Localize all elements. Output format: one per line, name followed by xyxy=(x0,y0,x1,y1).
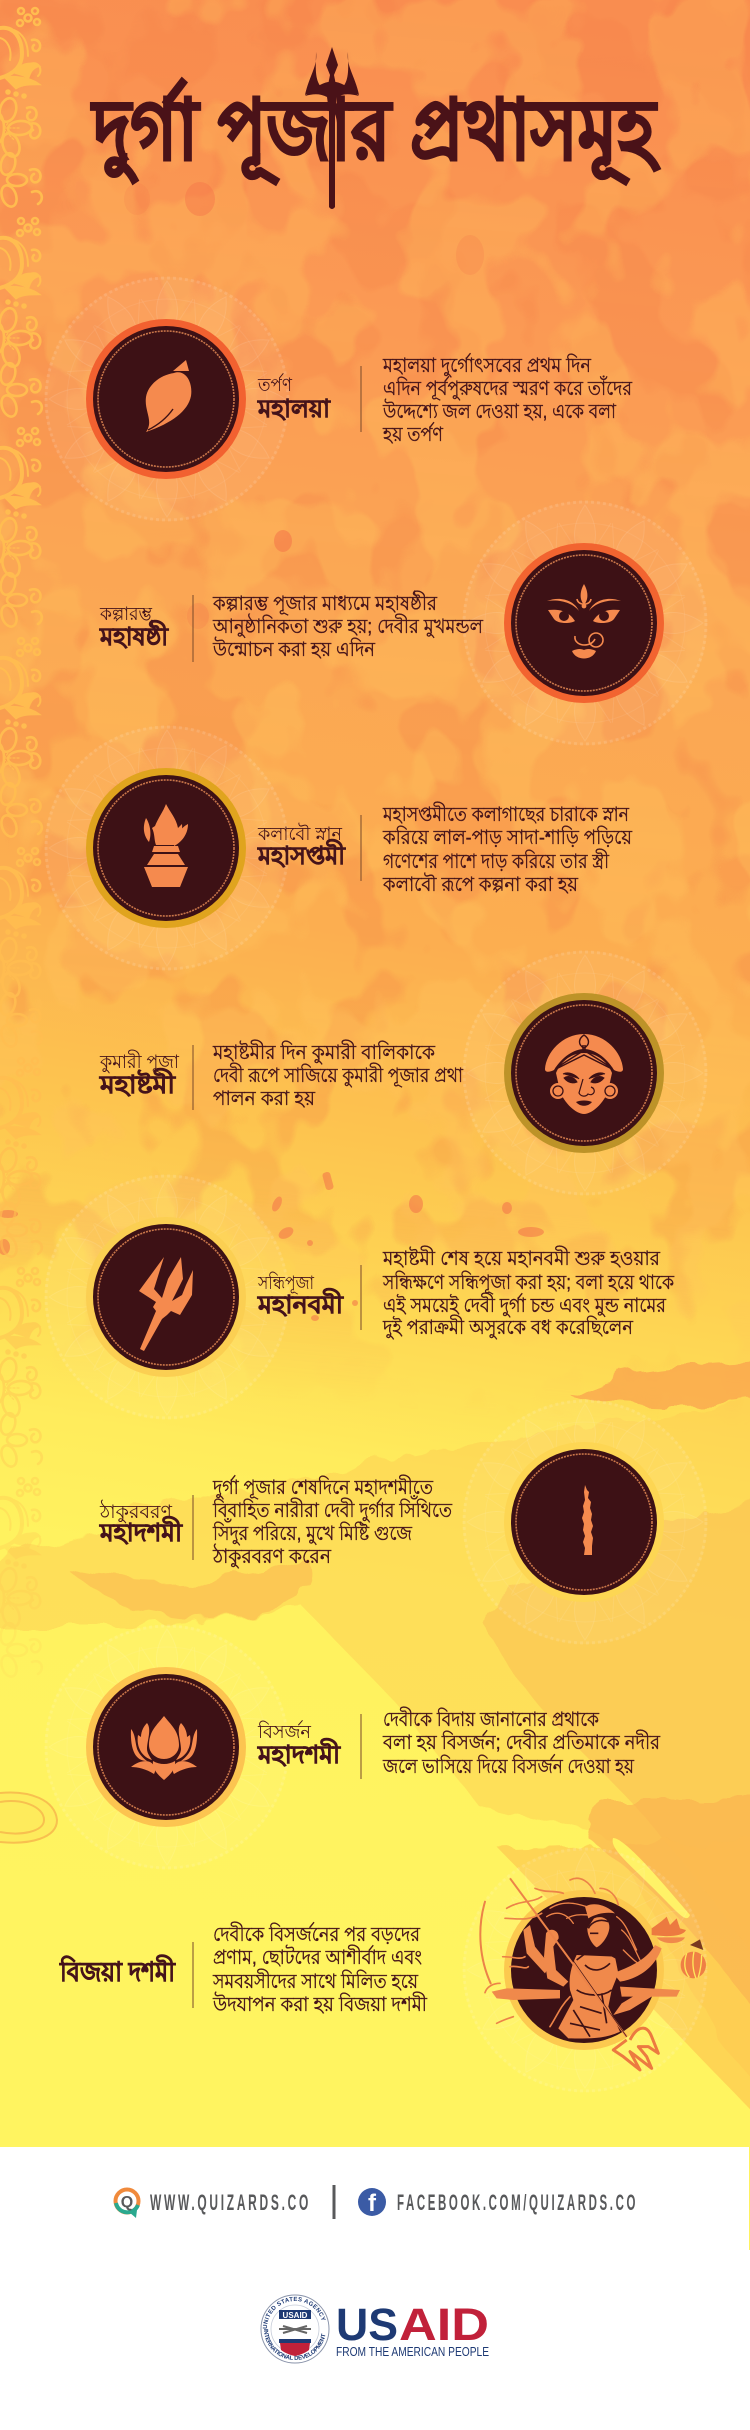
icon: kalash pot with plant xyxy=(86,768,246,928)
lower orange wash xyxy=(0,1360,750,2130)
description xyxy=(212,1922,427,2016)
footer panel xyxy=(114,2147,750,2364)
USAID wordmark: AID xyxy=(399,2299,489,2350)
description: উদযাপন করা হয় বিজয়া দশমী xyxy=(212,1992,427,2016)
description: দেবীকে বিদায় জানানোর প্রথাকে xyxy=(383,1707,600,1731)
divider xyxy=(360,815,362,881)
label: মহাষষ্ঠী xyxy=(99,620,169,651)
description: আনুষ্ঠানিকতা শুরু হয়; দেবীর মুখমন্ডল xyxy=(212,614,484,638)
description: মহালয়া দুর্গোৎসবের প্রথম দিন xyxy=(382,353,592,377)
divider xyxy=(192,1495,194,1560)
rosette background xyxy=(463,1400,707,1644)
description: সমবয়সীদের সাথে মিলিত হয়ে xyxy=(212,1969,419,1993)
label: মহাষ্টমী xyxy=(99,1068,176,1099)
description xyxy=(382,802,633,896)
USAID wordmark: FROM THE AMERICAN PEOPLE xyxy=(336,2344,489,2359)
label xyxy=(257,823,346,870)
description: হয় তর্পণ xyxy=(382,422,444,446)
flecks xyxy=(0,1171,544,1321)
label xyxy=(99,604,169,651)
description xyxy=(382,353,633,446)
rosette background xyxy=(45,1625,289,1869)
icon: quizards logo: Q xyxy=(121,2194,133,2211)
icon: goddess Durga illustration xyxy=(480,1878,706,2070)
description: মহাষ্টমীর দিন কুমারী বালিকাকে xyxy=(212,1040,436,1064)
divider xyxy=(360,1265,362,1330)
description: দেবীকে বিসর্জনের পর বড়দের xyxy=(213,1922,421,1946)
label: মহালয়া xyxy=(257,395,332,423)
label: সন্ধিপূজা xyxy=(257,1272,314,1294)
description xyxy=(382,1707,661,1778)
title xyxy=(90,47,660,209)
panel: বিজয়া দশমী xyxy=(59,1848,707,2092)
label xyxy=(257,1272,344,1319)
description: প্রণাম, ছোটদের আশীর্বাদ এবং xyxy=(213,1945,422,1969)
icon: trident xyxy=(86,1217,246,1377)
label: কল্পারম্ভ xyxy=(99,604,153,625)
panel: মহাষষ্ঠী xyxy=(99,501,707,745)
USAID wordmark: US xyxy=(336,2299,398,2350)
panel: মহাদশমী ঠাকুরবরণ xyxy=(99,1400,707,1644)
label: বিসর্জন xyxy=(257,1720,312,1743)
description: ঠাকুরবরণ করেন xyxy=(212,1544,332,1568)
description xyxy=(212,1040,464,1110)
divider xyxy=(192,1045,194,1110)
description xyxy=(382,1246,675,1339)
label: মহাদশমী xyxy=(99,1516,183,1547)
label: মহাদশমী xyxy=(257,1738,341,1769)
description: দুর্গা পূজার শেষদিনে মহাদশমীতে xyxy=(212,1475,434,1499)
panel: মহাষ্টমী xyxy=(99,951,707,1195)
rosette background xyxy=(45,1175,289,1419)
description: সন্ধিক্ষণে সন্ধিপূজা করা হয়; বলা হয়ে থাকে xyxy=(382,1271,675,1294)
label: তর্পণ xyxy=(257,373,292,396)
description: সিঁদুর পরিয়ে, মুখে মিষ্টি গুজে xyxy=(212,1519,413,1545)
description: দুই পরাক্রমী অসুরকে বধ করেছিলেন xyxy=(382,1315,634,1339)
description: কলাবৌ রূপে কল্পনা করা হয় xyxy=(382,873,579,896)
description xyxy=(212,1475,453,1568)
rosette background xyxy=(463,501,707,745)
description: বলা হয় বিসর্জন; দেবীর প্রতিমাকে নদীর xyxy=(382,1730,661,1754)
divider xyxy=(360,366,362,432)
divider xyxy=(192,1942,194,2008)
icon: sindoor streak xyxy=(504,1442,664,1602)
description: দেবী রূপে সাজিয়ে কুমারী পূজার প্রথা xyxy=(213,1063,464,1087)
icon: USAID seal: UNITED STATES AGENCY xyxy=(262,2296,326,2328)
panel: মহাদশমী বিসর্জন xyxy=(45,1625,661,1869)
icon: USAID seal: INTERNATIONAL DEVELOPMENT xyxy=(264,2329,326,2360)
description: বিবাহিত নারীরা দেবী দুর্গার সিঁথিতে xyxy=(212,1496,453,1522)
description: এদিন পূর্বপুরুষদের স্মরণ করে তাঁদের xyxy=(383,376,633,400)
icon: young girl face with crown xyxy=(504,993,664,1153)
website: WWW.QUIZARDS.CO xyxy=(150,2190,311,2215)
rosette background xyxy=(45,726,289,970)
divider xyxy=(192,595,194,662)
rosette background xyxy=(463,1848,707,2092)
label xyxy=(257,1720,341,1769)
label: মহাসপ্তমী xyxy=(257,839,346,870)
description: কল্পারম্ভ পূজার মাধ্যমে মহাষষ্ঠীর xyxy=(212,591,438,615)
icon: USAID seal xyxy=(260,2294,330,2364)
icon: USAID seal: USAID xyxy=(283,2311,308,2320)
label xyxy=(99,1500,183,1547)
USAID wordmark xyxy=(336,2299,489,2359)
label: ঠাকুরবরণ xyxy=(99,1500,172,1523)
rosette background xyxy=(463,951,707,1195)
panel: মহানবমী xyxy=(45,1175,675,1419)
panel: মহাসপ্তমী xyxy=(45,726,633,970)
description: পালন করা হয় xyxy=(213,1088,316,1110)
label: কুমারী পূজা xyxy=(99,1050,179,1073)
description: মহাসপ্তমীতে কলাগাছের চারাকে স্নান xyxy=(382,802,630,826)
icon: quizards logo xyxy=(116,2190,138,2218)
description: করিয়ে লাল-পাড় সাদা-শাড়ি পড়িয়ে xyxy=(382,826,633,849)
description: গণেশের পাশে দাড় করিয়ে তার স্ত্রী xyxy=(383,849,609,873)
icon: facebook: f xyxy=(368,2190,377,2217)
icon: trident in title xyxy=(305,47,359,209)
divider xyxy=(360,1714,362,1779)
icon: goddess face with third eye xyxy=(504,543,664,703)
heading text: দুর্গা পূজার প্রথাসমূহ xyxy=(90,78,660,186)
icon: conch shell xyxy=(86,319,246,479)
icon: lotus xyxy=(86,1667,246,1827)
description: উদ্দেশ্যে জল দেওয়া হয়, একে বলা xyxy=(382,399,617,423)
description xyxy=(212,591,484,661)
divider xyxy=(332,2185,336,2219)
description: উন্মোচন করা হয় এদিন xyxy=(212,637,376,661)
label xyxy=(99,1050,179,1099)
panel: মহালয়া xyxy=(45,277,633,521)
rosette background xyxy=(45,277,289,521)
description: মহাষ্টমী শেষ হয়ে মহানবমী শুরু হওয়ার xyxy=(382,1246,661,1270)
label: মহানবমী xyxy=(257,1288,344,1319)
decorative floral border at left edge xyxy=(0,8,42,1679)
label: বিজয়া দশমী xyxy=(59,1954,176,1987)
label: কলাবৌ স্নান xyxy=(257,823,343,845)
description: জলে ভাসিয়ে দিয়ে বিসর্জন দেওয়া হয় xyxy=(382,1754,635,1778)
icon: facebook xyxy=(358,2188,386,2217)
label xyxy=(257,373,332,423)
description: এই সময়েই দেবী দুর্গা চন্ড এবং মুন্ড নামের xyxy=(383,1293,667,1317)
